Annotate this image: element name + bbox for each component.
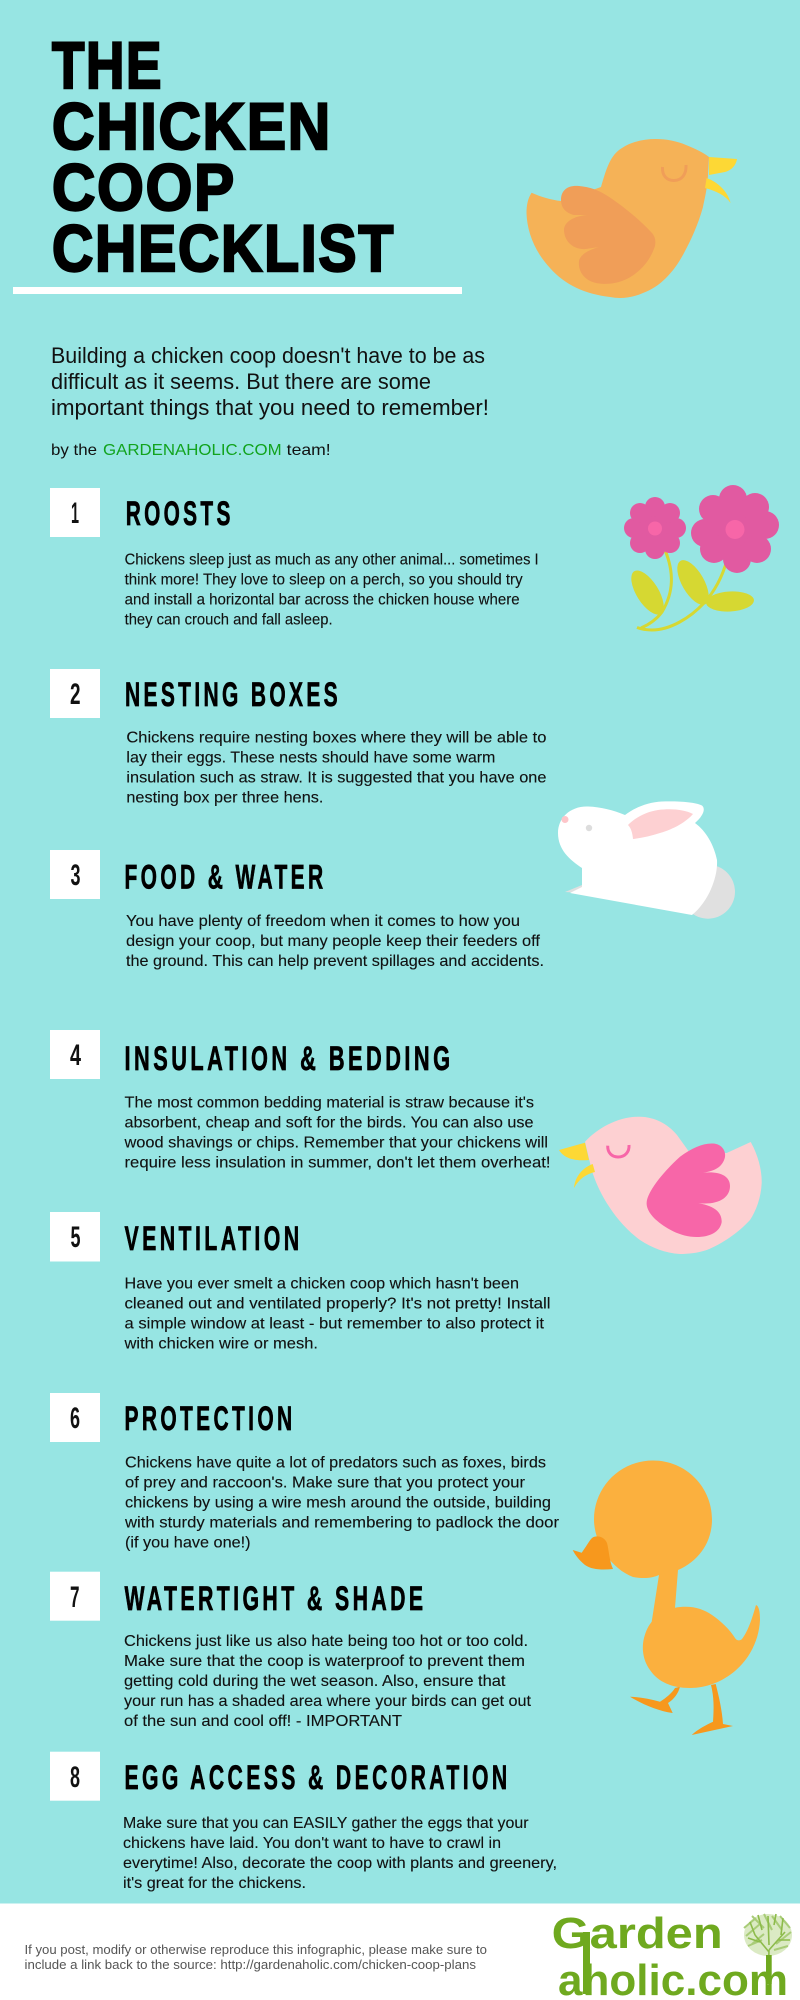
body 5: with chicken wire or mesh. [123, 1336, 318, 1353]
number box 5: 5 [70, 1221, 80, 1254]
number box 3 [50, 850, 100, 899]
footer [0, 1904, 800, 2000]
body 1: and install a horizontal bar across the chicken house where [125, 591, 520, 608]
number box 8 [50, 1752, 100, 1801]
body 3: design your coop, but many people keep their feeders off [126, 933, 541, 950]
body 3: the ground. This can help prevent spillages and accidents. [126, 953, 544, 970]
intro text: important things that you need to remember! [51, 395, 489, 420]
byline: team! [287, 442, 331, 459]
section 4: insulation and bedding [50, 1030, 550, 1172]
body 2: insulation such as straw. It is suggested that you have one [126, 770, 546, 787]
body 7: of the sun and cool off! - IMPORTANT [124, 1713, 402, 1730]
body 1: Chickens sleep just as much as any other animal... sometimes I [125, 551, 539, 568]
section 8: egg access and decoration [50, 1752, 557, 1892]
body 4: The most common bedding material is straw because it's [124, 1095, 534, 1112]
body 6: chickens by using a wire mesh around the outside, building [125, 1495, 551, 1512]
section 3: food and water [50, 850, 544, 970]
title: THE [52, 28, 163, 102]
number box 7 [50, 1572, 100, 1621]
body 4 [123, 1095, 550, 1172]
heading 8: EGG ACCESS & DECORATION [124, 1759, 510, 1797]
body 7: Chickens just like us also hate being too hot or too cold. [124, 1633, 528, 1650]
body 8: everytime! Also, decorate the coop with plants and greenery, [123, 1855, 557, 1872]
heading 6: PROTECTION [124, 1400, 296, 1438]
heading 4: INSULATION & BEDDING [124, 1040, 454, 1078]
body 7: Make sure that the coop is waterproof to prevent them [124, 1653, 525, 1670]
number box 2: 2 [70, 678, 80, 711]
body 3: You have plenty of freedom when it comes to how you [126, 913, 520, 930]
icon: pink bird [559, 1117, 762, 1254]
body 6: (if you have one!) [125, 1535, 251, 1552]
footer note: include a link back to the source: http://gardenaholic.com/chicken-coop-plans [24, 1957, 476, 1972]
heading 2: NESTING BOXES [125, 676, 341, 714]
number box 6: 6 [70, 1402, 80, 1435]
body 7: your run has a shaded area where your birds can get out [124, 1693, 532, 1710]
body 4: absorbent, cheap and soft for the birds. You can also use [124, 1115, 534, 1132]
intro text: difficult as it seems. But there are some [51, 369, 431, 394]
title [52, 28, 395, 285]
body 5: cleaned out and ventilated properly? It's not pretty! Install [124, 1296, 550, 1313]
body 4: require less insulation in summer, don't let them overheat! [124, 1155, 550, 1172]
body 2: Chickens require nesting boxes where they will be able to [126, 730, 546, 747]
section 6: protection [50, 1393, 560, 1552]
icon: pink flowers [624, 485, 779, 630]
body 1: they can crouch and fall asleep. [125, 611, 333, 628]
body 4: wood shavings or chips. Remember that your chickens will [123, 1135, 548, 1152]
number box 5 [50, 1212, 100, 1262]
body 8 [123, 1815, 557, 1892]
body 5 [123, 1276, 550, 1353]
logo: gardenaholic.com: Garden [552, 1909, 723, 1958]
number box 4 [50, 1030, 100, 1079]
body 6: with sturdy materials and remembering to padlock the door [124, 1515, 560, 1532]
title: CHICKEN [52, 89, 332, 163]
logo: gardenaholic.com [552, 1909, 792, 2000]
section 1: roosts [50, 488, 539, 628]
footer note: If you post, modify or otherwise reproduce this infographic, please make sure to [24, 1942, 487, 1957]
number box 6 [50, 1393, 100, 1442]
number box 8: 8 [70, 1761, 80, 1794]
number box 4: 4 [70, 1039, 81, 1072]
body 8: it's great for the chickens. [123, 1875, 306, 1892]
footer note [24, 1942, 487, 1972]
body 8: Make sure that you can EASILY gather the eggs that your [123, 1815, 529, 1832]
heading 7: WATERTIGHT & SHADE [124, 1580, 426, 1618]
intro text: Building a chicken coop doesn't have to be as [51, 343, 485, 368]
title underline [13, 287, 462, 294]
body 1: think more! They love to sleep on a perch, so you should try [125, 571, 523, 588]
number box 7: 7 [70, 1581, 80, 1614]
body 2: lay their eggs. These nests should have some warm [126, 750, 495, 767]
body 2: nesting box per three hens. [126, 790, 323, 807]
icon: white rabbit [558, 801, 735, 919]
body 7: getting cold during the wet season. Also, ensure that [124, 1673, 506, 1690]
body 6 [124, 1455, 560, 1552]
heading 1: ROOSTS [126, 495, 234, 533]
number box 3: 3 [70, 859, 80, 892]
number box 1 [50, 488, 100, 537]
body 6: of prey and raccoon's. Make sure that you protect your [125, 1475, 526, 1492]
body 3 [126, 913, 544, 970]
icon: orange chick [526, 139, 737, 298]
body 6: Chickens have quite a lot of predators such as foxes, birds [125, 1455, 546, 1472]
byline: by the [51, 442, 97, 459]
icon: logo tree [744, 1914, 792, 1985]
body 7 [124, 1633, 532, 1730]
body 8: chickens have laid. You don't want to have to crawl in [123, 1835, 501, 1852]
section 5: ventilation [50, 1212, 550, 1353]
byline [51, 442, 331, 459]
intro text [51, 343, 489, 420]
heading 5: VENTILATION [124, 1220, 302, 1258]
heading 3: FOOD & WATER [124, 858, 326, 896]
body 2 [126, 730, 546, 807]
title: CHECKLIST [52, 211, 395, 285]
number box 2 [50, 669, 100, 718]
body 1 [125, 551, 539, 628]
body 5: a simple window at least - but remember to also protect it [124, 1316, 545, 1333]
icon: orange duck [573, 1460, 760, 1735]
title: COOP [52, 150, 236, 224]
byline: GARDENAHOLIC.COM [103, 442, 282, 459]
section 7: watertight and shade [50, 1572, 532, 1730]
number box 1: 1 [71, 497, 79, 530]
section 2: nesting boxes [50, 669, 546, 807]
body 5: Have you ever smelt a chicken coop which hasn't been [124, 1276, 519, 1293]
